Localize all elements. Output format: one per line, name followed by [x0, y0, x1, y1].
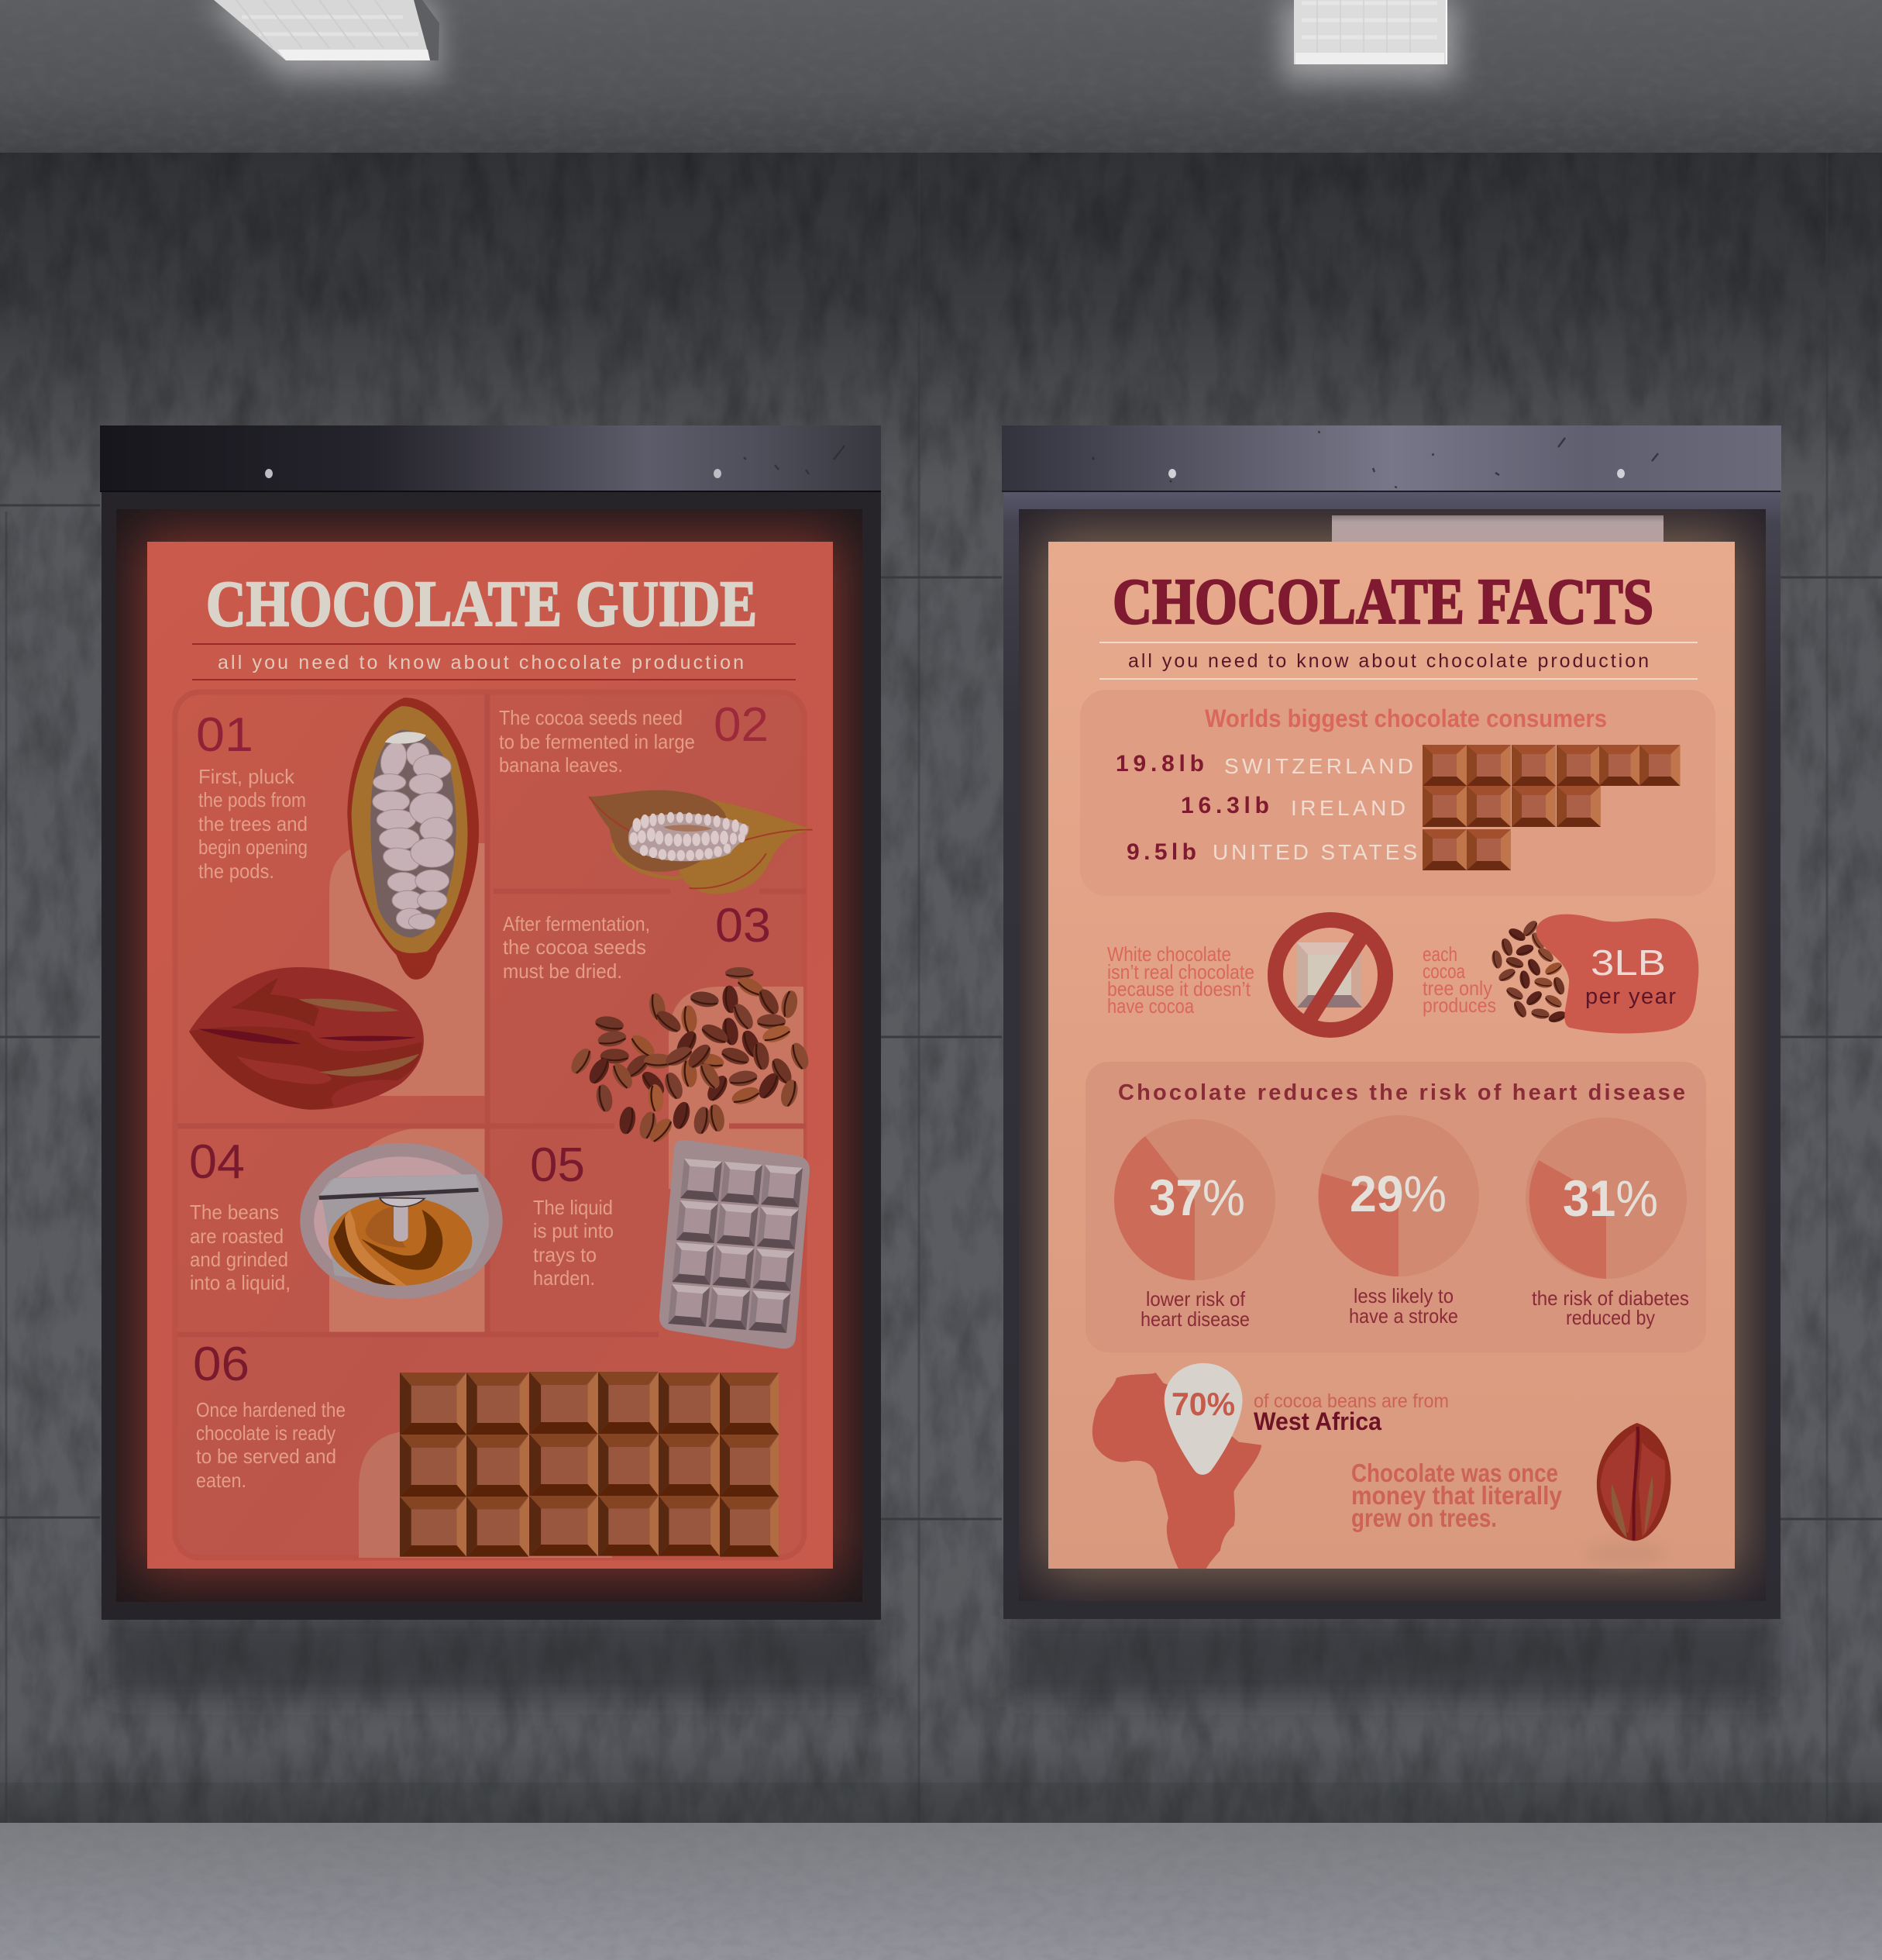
screws [265, 469, 721, 478]
icon: open cocoa pod [347, 698, 479, 980]
step 02: The cocoa seeds need [499, 706, 683, 729]
subtitle rule lines [192, 644, 796, 680]
light glow [203, 0, 1457, 81]
icon: chocolate mould tray [659, 1140, 810, 1349]
panel: heart disease [1086, 1062, 1706, 1352]
fact: cocoa tree text: cocoa [1423, 959, 1465, 983]
step 05: The liquid [533, 1196, 613, 1219]
right poster: chocolate facts [1048, 542, 1735, 1569]
fact: money on trees text: money that literally [1351, 1481, 1563, 1510]
step 01: First, pluck [198, 765, 295, 788]
row: United States: UNITED STATES [1213, 840, 1417, 864]
pie chart 31%: 31% [1563, 1169, 1658, 1227]
step 01: begin opening [198, 835, 308, 859]
screws [1168, 469, 1625, 478]
title: CHOCOLATE FACTS [1113, 566, 1653, 638]
accent block step 04 [329, 1126, 487, 1334]
icon: chocolate bar [400, 1372, 779, 1557]
light reflection [1332, 515, 1664, 543]
fact: West Africa text: West Africa [1254, 1407, 1381, 1435]
row: Ireland [1181, 793, 1405, 820]
panel: biggest consumers [1080, 690, 1715, 896]
pie chart 37%: lower risk of [1146, 1287, 1246, 1311]
accent block step 06 [359, 1431, 612, 1558]
panel heading: Chocolate reduces the risk of heart disease [1118, 1080, 1685, 1105]
fact: money on trees text: Chocolate was once [1351, 1459, 1558, 1487]
step 01: the trees and [198, 812, 308, 835]
step 03: After fermentation, [503, 912, 650, 935]
pie chart 31% [1526, 1118, 1689, 1329]
step 03: must be dried. [503, 959, 622, 983]
step 05: trays to [533, 1243, 597, 1266]
fact: cocoa tree text [1423, 942, 1496, 1017]
subtitle: all you need to know about chocolate production [218, 652, 744, 673]
ceiling light left [214, 0, 439, 60]
poster glow [1039, 532, 1744, 1578]
panel heading: Worlds biggest chocolate consumers [1205, 704, 1607, 732]
fact: money on trees text: grew on trees. [1351, 1504, 1497, 1532]
step 04: 04 [189, 1135, 245, 1189]
step 01: the pods from [198, 788, 306, 811]
pie chart 29%: less likely to [1354, 1284, 1454, 1307]
step 05: harden. [533, 1266, 595, 1290]
fact: cocoa tree text: produces [1423, 994, 1496, 1017]
map: Africa with 70% pin [1092, 1363, 1261, 1569]
step 03: the cocoa seeds [503, 935, 646, 959]
pie chart 37%: 37% [1149, 1169, 1245, 1226]
step 04: into a liquid, [190, 1271, 291, 1294]
icon: small cocoa beans [1491, 918, 1567, 1025]
step 06 [193, 1338, 346, 1492]
step 04: are roasted [190, 1225, 284, 1248]
row: United States [1127, 839, 1417, 865]
step 04: and grinded [190, 1248, 288, 1271]
fact: white chocolate text: isn’t real chocolate [1107, 960, 1254, 983]
floor [0, 1823, 1882, 1960]
pie chart 31%: the risk of diabetes [1532, 1287, 1689, 1310]
icon: cocoa pod with dust [1585, 1423, 1670, 1566]
step 01: the pods. [198, 859, 274, 883]
fact: white chocolate text [1107, 942, 1254, 1018]
ceiling [0, 0, 1882, 153]
step 05: is put into [533, 1219, 614, 1242]
accent block step 03 [669, 987, 803, 1189]
fact: cocoa tree text: each [1423, 942, 1457, 966]
left display frame [100, 425, 881, 1620]
step 02: banana leaves. [499, 753, 623, 777]
callout: 3LB per year: per year [1585, 984, 1676, 1009]
step 06: Once hardened the [196, 1398, 346, 1421]
row: Switzerland: 19.8lb [1116, 751, 1204, 777]
step 05 [530, 1138, 614, 1290]
step 05: 05 [530, 1138, 585, 1192]
fact: West Africa text [1254, 1390, 1449, 1435]
step 06: eaten. [196, 1469, 246, 1492]
fact: cocoa tree text: tree only [1423, 977, 1492, 1000]
step 03 [503, 899, 771, 983]
subtitle: all you need to know about chocolate production [1128, 650, 1649, 672]
step 01 [196, 708, 308, 883]
fact: white chocolate text: have cocoa [1107, 994, 1194, 1018]
fact: white chocolate text: because it doesn’t [1107, 977, 1251, 1001]
pie chart 37% [1114, 1119, 1275, 1331]
row: Switzerland: SWITZERLAND [1224, 754, 1413, 778]
row: Switzerland [1116, 751, 1413, 778]
poster glow [136, 532, 845, 1578]
pie chart 31%: reduced by [1566, 1306, 1655, 1329]
step 06: chocolate is ready [196, 1421, 335, 1445]
step 02: to be fermented in large [499, 730, 695, 753]
row: United States: 9.5lb [1127, 839, 1196, 865]
row: Ireland: 16.3lb [1181, 793, 1269, 818]
step 06: 06 [193, 1338, 249, 1391]
right display frame [1002, 425, 1781, 1619]
callout: 3LB per year [1536, 915, 1698, 1033]
step 04 [189, 1135, 291, 1294]
icon: closed cocoa pod [189, 967, 424, 1110]
fact: white chocolate text: White chocolate [1107, 942, 1231, 966]
pie chart 29%: 29% [1350, 1165, 1447, 1222]
fact: West Africa text: of cocoa beans are from [1254, 1390, 1449, 1412]
icon: dried cocoa beans [567, 967, 812, 1145]
icon: no white chocolate [1275, 920, 1385, 1030]
map: Africa with 70% pin: 70% [1172, 1386, 1235, 1422]
subtitle rule lines [1099, 642, 1698, 679]
step 01: 01 [196, 708, 253, 762]
pie chart 37%: heart disease [1141, 1307, 1250, 1331]
pie chart 29%: have a stroke [1349, 1304, 1458, 1328]
step 02: 02 [714, 698, 769, 752]
steps panel [175, 692, 813, 1558]
callout: 3LB per year: 3LB [1591, 942, 1666, 983]
fact: money on trees text [1351, 1459, 1563, 1532]
icon: grinder with liquid chocolate [300, 1143, 503, 1299]
step 04: The beans [190, 1200, 279, 1224]
step 03: 03 [715, 899, 771, 952]
step 02 [499, 698, 769, 777]
title: CHOCOLATE GUIDE [206, 568, 757, 640]
accent block step 01 [329, 843, 487, 1096]
left poster: chocolate guide [147, 542, 833, 1569]
icon: seeds on banana leaves [589, 791, 813, 894]
ceiling light right [1294, 0, 1447, 64]
row: Ireland: IRELAND [1291, 796, 1405, 820]
chocolate bar chart [1423, 745, 1680, 870]
pie chart 29% [1318, 1115, 1479, 1328]
step 06: to be served and [196, 1445, 336, 1468]
